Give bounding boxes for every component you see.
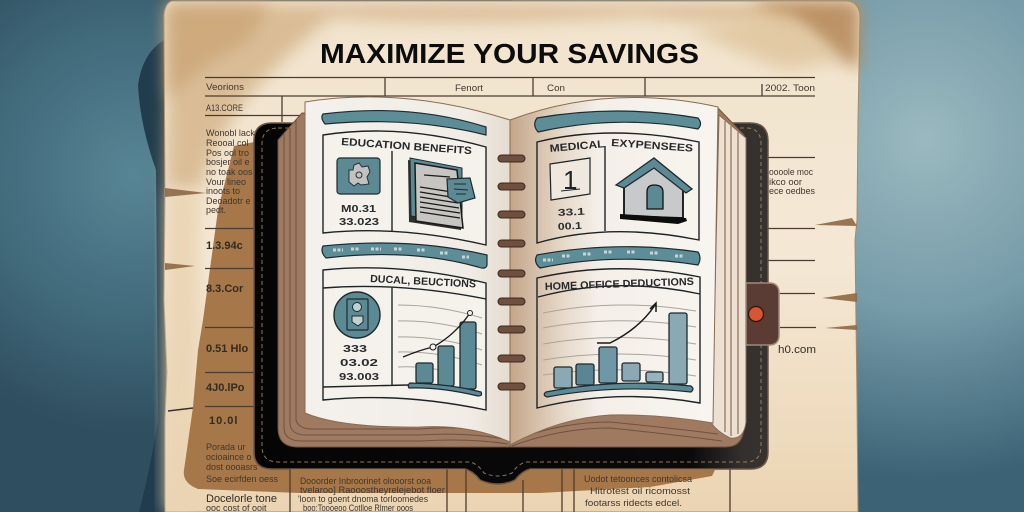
icon: puzzle gear — [337, 158, 380, 194]
parchment sheet — [164, 1, 860, 512]
lower left small print: ocioaince o — [206, 452, 252, 462]
right chain band — [536, 247, 700, 268]
panel: education benefits — [323, 131, 486, 245]
bar chart: deductions — [398, 305, 482, 396]
left body text: pedt. — [206, 205, 226, 215]
education figures: M0.31 — [341, 204, 377, 215]
deduction figures — [339, 344, 380, 383]
top form labels: Fenort — [455, 83, 484, 93]
wallet cover — [254, 123, 768, 484]
left body text: Reooal col — [206, 138, 249, 148]
left body text: no toak oos — [206, 167, 253, 177]
medical figures — [558, 207, 586, 233]
lower left small print — [206, 442, 279, 512]
heading: EDUCATION BENEFITS — [341, 136, 472, 157]
left header bar — [322, 111, 486, 135]
education figures — [339, 204, 380, 228]
right form text: h0.com — [778, 344, 816, 356]
left page — [305, 97, 510, 442]
stain: top right corner — [750, 2, 860, 70]
stain: upper right wash — [690, 12, 840, 70]
heading: DUCAL, BEUCTIONS — [370, 273, 476, 291]
heading: MEDICAL — [549, 138, 606, 155]
medical figures: 00.1 — [558, 221, 583, 233]
lower left small print: dost oooasrs — [206, 462, 258, 472]
book page edges — [278, 108, 746, 447]
bottom right small print — [584, 474, 692, 508]
trend arrow — [597, 303, 656, 343]
bottom right small print: Hitrotest oil ricomosst — [590, 486, 691, 496]
panel: medical expenses — [537, 133, 699, 243]
medical figures: 33.1 — [558, 207, 586, 219]
stain: top band — [166, 4, 850, 190]
bottom center small print: tvelaroo] Raooostheyrelejebot floer — [300, 485, 445, 495]
spiral rings — [498, 155, 525, 390]
right form text: ece oedbes — [769, 186, 815, 196]
form grid lines — [205, 78, 816, 512]
title: MAXIMIZE YOUR SAVINGS — [320, 38, 699, 69]
bottom center small print: Dooorder Inbroorinet olooorst ooa — [300, 476, 431, 486]
bottom center small print — [298, 476, 445, 512]
right form text: oooole moc — [769, 167, 813, 177]
deduction figures: 03.02 — [340, 358, 379, 369]
icon: calendar one: 1 — [563, 165, 577, 195]
education figures: 33.023 — [339, 217, 380, 228]
left body text: bosjer oil e — [206, 157, 250, 167]
bottom right small print: footarss ridects edcel. — [585, 498, 682, 508]
left body text: Vour lineo — [206, 177, 246, 187]
deduction figures: 93.003 — [339, 372, 380, 383]
right form text: ikco oor — [769, 177, 802, 187]
bottom center small print: 'loon to goent dnoma torloomedes — [298, 494, 428, 504]
right page — [510, 98, 718, 445]
stain: left tan strip — [165, 190, 200, 512]
top form labels: Con — [547, 83, 565, 93]
icon: outlet badge — [334, 292, 380, 338]
wallet clasp — [746, 283, 779, 345]
stain: left brown column — [184, 135, 715, 493]
left body text: Pos ool tro — [206, 148, 249, 158]
clasp button — [748, 306, 764, 322]
torn slit marks — [165, 188, 857, 330]
top form labels: 2002. Toon — [765, 83, 815, 93]
bar chart: home office — [543, 303, 696, 397]
lower left small print: Soe ecirfden oess — [206, 474, 279, 484]
left body text: Deoadotr e — [206, 196, 251, 206]
left form values: 1.3.94c — [206, 240, 243, 252]
left form values: 8.3.Cor — [206, 283, 244, 295]
left form values: 0.51 Hlo — [206, 343, 248, 355]
left form values — [206, 240, 248, 427]
top form labels: A13.CORE — [206, 103, 243, 113]
left body text: inoots to — [206, 186, 240, 196]
heading: EXYPENSEES — [611, 137, 693, 155]
bottom right small print: Uodot tetoonces contolicsa — [584, 474, 692, 484]
left form values: 4J0.lPo — [206, 382, 245, 394]
left body text — [206, 128, 255, 215]
left chain band — [322, 243, 487, 268]
trend line — [403, 310, 472, 357]
heading: HOME OFFICE DEDUCTIONS — [545, 276, 694, 293]
lower left small print: Porada ur — [206, 442, 246, 452]
paper shadow — [138, 38, 168, 512]
panel: dental deductions — [323, 268, 486, 410]
wallet stitching — [262, 128, 761, 476]
icon: house — [616, 158, 692, 224]
right header bar — [535, 111, 700, 132]
icon: document — [408, 158, 475, 230]
heading — [549, 137, 693, 155]
left body text: Wonobl lack — [206, 128, 255, 138]
icon: calendar one — [550, 158, 590, 200]
slit: lower left — [168, 408, 193, 411]
top form labels: Veorions — [206, 82, 245, 92]
left form values: 10.0l — [209, 415, 238, 427]
lower left small print: Docelorle tone — [206, 493, 277, 505]
deduction figures: 333 — [343, 344, 368, 355]
stain: top left — [165, 4, 270, 100]
panel: home office deductions — [537, 269, 700, 408]
top form labels — [206, 82, 815, 113]
right form text — [769, 167, 816, 356]
